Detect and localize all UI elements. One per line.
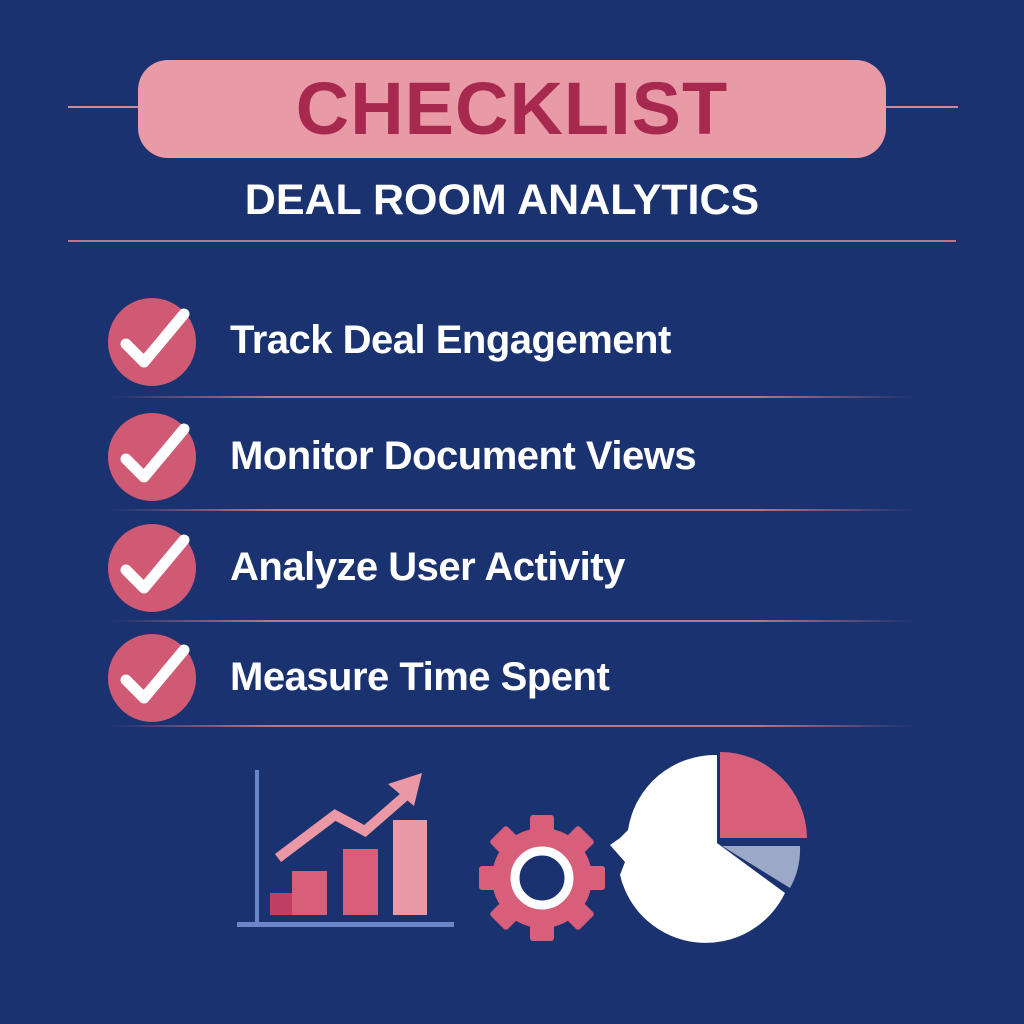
checklist <box>108 298 196 722</box>
title pill: CHECKLIST <box>296 67 728 150</box>
icon: pie chart <box>610 752 807 943</box>
title pill <box>138 60 886 158</box>
subtitle: DEAL ROOM ANALYTICS <box>245 176 759 224</box>
item 2: Monitor Document Views <box>230 434 696 478</box>
item 1: Track Deal Engagement <box>230 318 671 362</box>
icons: check circles <box>108 298 196 722</box>
item 3: Analyze User Activity <box>230 545 625 589</box>
icon: bar chart <box>237 770 454 927</box>
decorative side lines <box>68 106 958 108</box>
item 4: Measure Time Spent <box>230 655 609 699</box>
icon: gear <box>479 815 605 941</box>
